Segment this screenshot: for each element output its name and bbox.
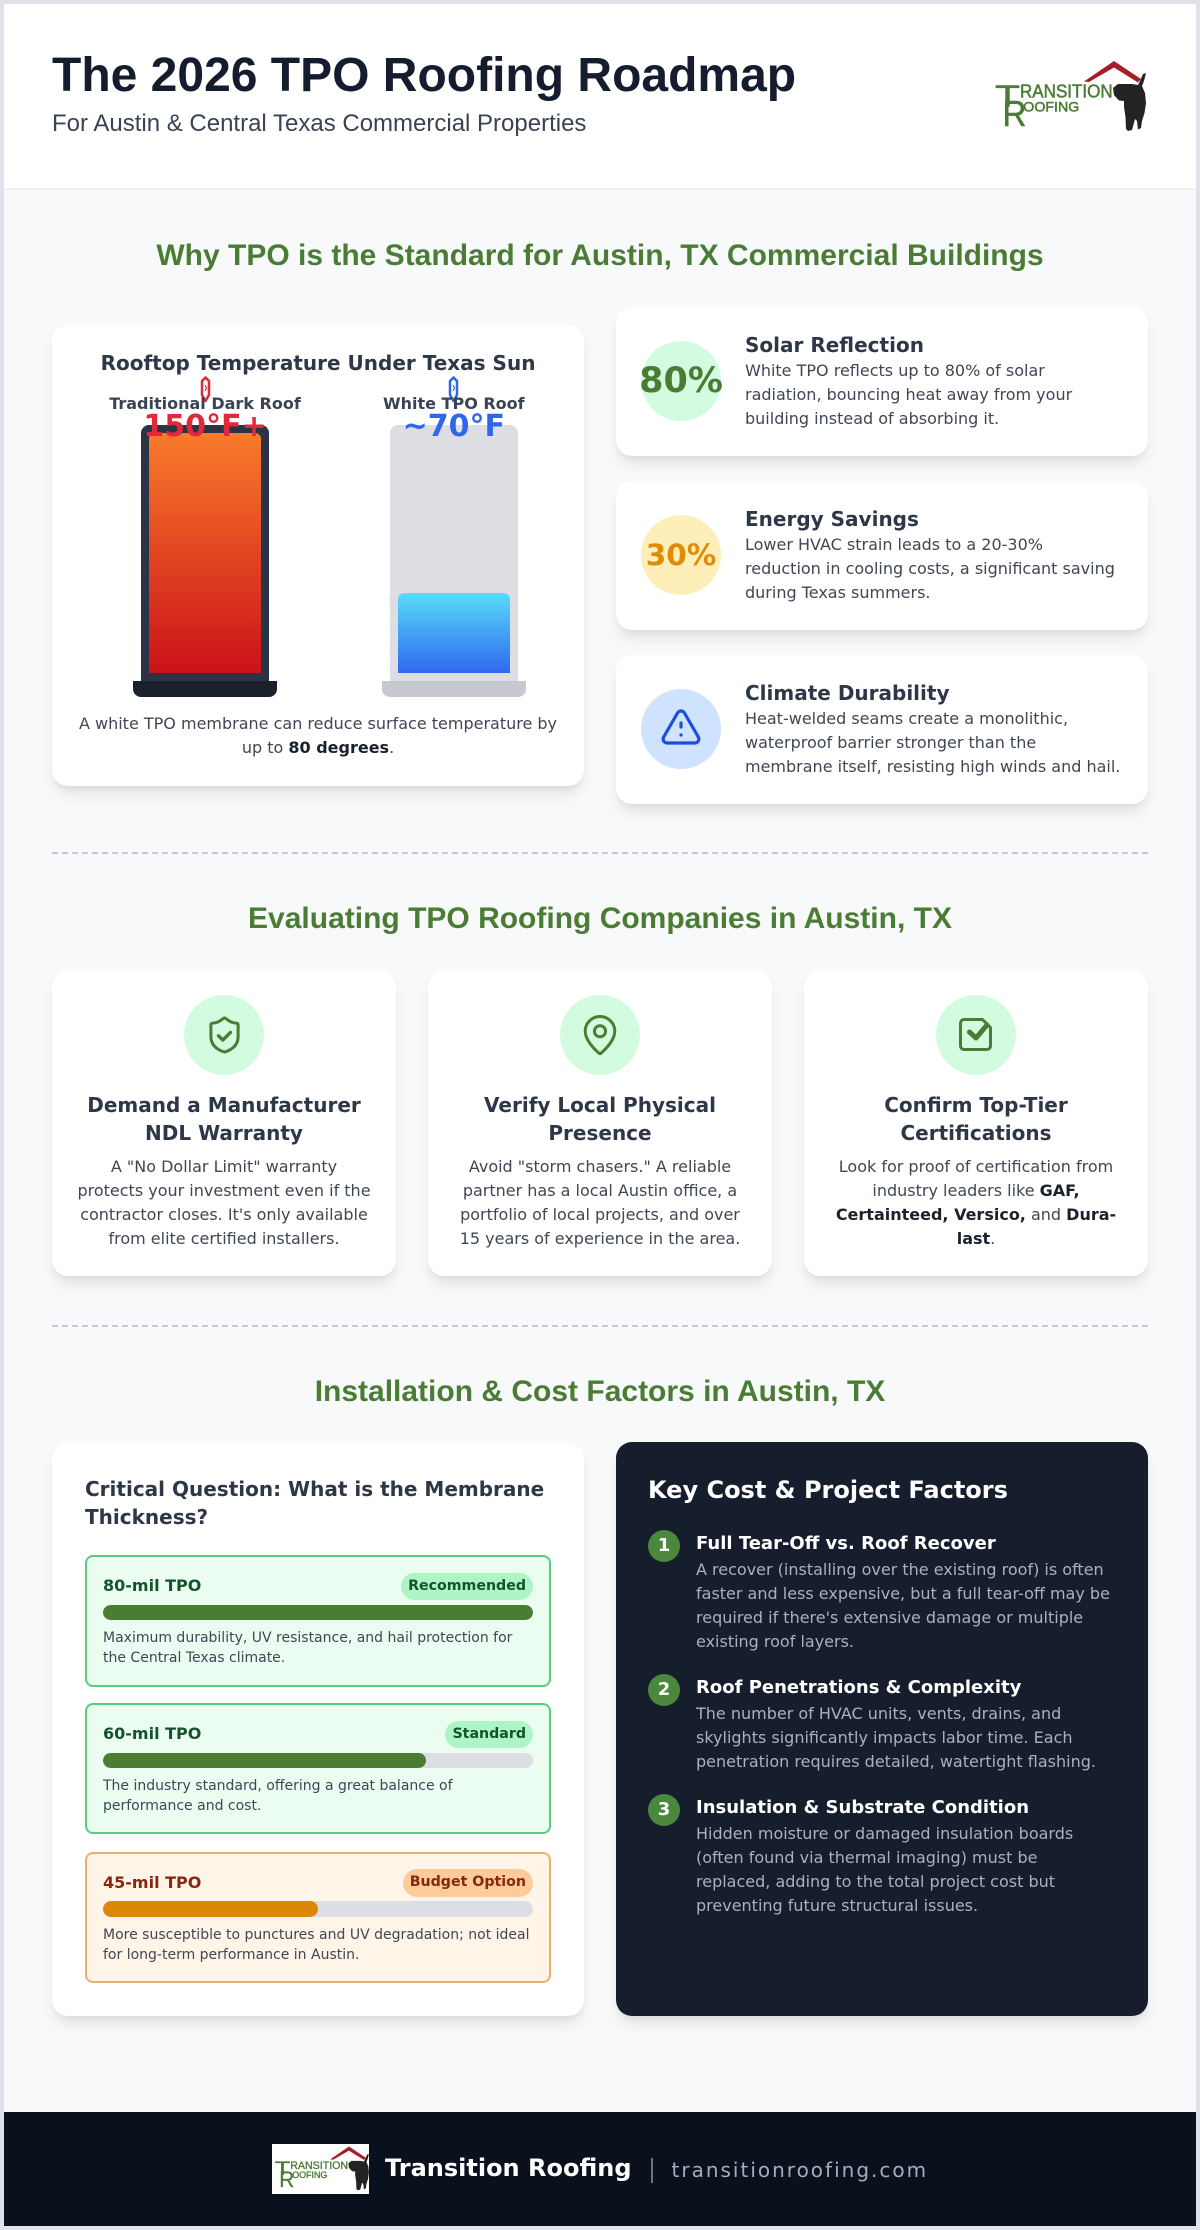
panel: key cost factors bbox=[616, 1442, 1148, 2016]
card text: from elite certified installers. bbox=[108, 1229, 340, 1248]
card text: White TPO reflects up to 80% of solar bbox=[745, 360, 1045, 380]
footer logo: RANSITION bbox=[290, 2160, 348, 2172]
panel: solar reflection bbox=[616, 307, 1148, 456]
card heading: Certifications bbox=[900, 1121, 1052, 1145]
card heading: Solar Reflection bbox=[745, 333, 924, 357]
factor text: skylights significantly impacts labor time. Each bbox=[696, 1728, 1073, 1747]
panel heading: Thickness? bbox=[85, 1505, 208, 1529]
option text bbox=[103, 1630, 512, 1666]
card text: Heat-welded seams create a monolithic, bbox=[745, 708, 1068, 728]
thickness bar bbox=[103, 1752, 533, 1768]
icon: map pin bbox=[560, 995, 640, 1075]
label: White TPO Roof bbox=[383, 394, 525, 413]
card heading: Confirm Top-Tier bbox=[884, 1093, 1068, 1117]
label: Traditional Dark Roof bbox=[109, 394, 301, 413]
number badge: 1 bbox=[658, 1535, 670, 1556]
stat: 30% bbox=[641, 515, 721, 595]
option text bbox=[102, 1778, 453, 1814]
factor text bbox=[696, 1560, 1110, 1651]
panel: energy savings bbox=[616, 481, 1148, 630]
footer logo: OOFING bbox=[292, 2170, 327, 2180]
factor 3 bbox=[648, 1794, 1073, 1915]
option: 60-mil bbox=[85, 1703, 551, 1834]
icon: shield check bbox=[184, 995, 264, 1075]
badge bbox=[401, 1572, 533, 1600]
card text bbox=[77, 1157, 371, 1248]
fill level bbox=[398, 593, 510, 673]
temperature value: ~70°F bbox=[403, 408, 505, 444]
icon: red thermometer bbox=[200, 376, 210, 402]
card heading: Demand a Manufacturer bbox=[87, 1093, 361, 1117]
logo: Transition Roofing: R bbox=[1002, 93, 1026, 134]
factor 2 bbox=[648, 1674, 1096, 1771]
panel: rooftop temperature comparison bbox=[52, 325, 584, 786]
factor text: replaced, adding to the total project cost but bbox=[696, 1872, 1055, 1891]
card text bbox=[836, 1157, 1116, 1248]
factor text: The number of HVAC units, vents, drains, and bbox=[696, 1704, 1061, 1723]
card text: contractor closes. It's only available bbox=[80, 1205, 368, 1224]
logo: Transition Roofing: T bbox=[995, 78, 1020, 114]
subtitle: For Austin & Central Texas Commercial Properties bbox=[52, 110, 586, 136]
panel: local presence bbox=[428, 971, 772, 1276]
card heading: Verify Local Physical bbox=[484, 1093, 716, 1117]
card text: portfolio of local projects, and over bbox=[460, 1205, 740, 1224]
chart heading: Rooftop Temperature Under Texas Sun bbox=[101, 351, 535, 375]
option name: 45-mil TPO bbox=[103, 1873, 201, 1892]
factor text: faster and less expensive, but a full tear-off may be bbox=[696, 1584, 1110, 1603]
card heading bbox=[87, 1093, 361, 1145]
footer logo: R bbox=[279, 2167, 294, 2192]
panel: membrane thickness bbox=[52, 1443, 584, 2016]
factor 1 bbox=[648, 1530, 1110, 1651]
factor text bbox=[696, 1824, 1073, 1915]
badge: Standard bbox=[452, 1726, 526, 1742]
thermometer: traditional dark roof bbox=[109, 376, 301, 697]
card text: last. bbox=[957, 1229, 995, 1248]
option: 80-mil bbox=[85, 1555, 551, 1686]
factor heading: Full Tear-Off vs. Roof Recover bbox=[696, 1533, 996, 1554]
option text: The industry standard, offering a great balance of bbox=[103, 1778, 453, 1794]
option text: More susceptible to punctures and UV degradation; not ideal bbox=[103, 1927, 530, 1943]
panel: climate durability bbox=[616, 655, 1148, 804]
factor text bbox=[696, 1704, 1096, 1771]
factor heading: Insulation & Substrate Condition bbox=[696, 1797, 1029, 1818]
option name: 60-mil TPO bbox=[103, 1724, 201, 1743]
card text: partner has a local Austin office, a bbox=[463, 1181, 737, 1200]
card heading bbox=[484, 1093, 716, 1145]
thermometer: white TPO roof bbox=[382, 376, 526, 697]
number badge bbox=[648, 1794, 680, 1826]
option text: the Central Texas climate. bbox=[103, 1650, 285, 1666]
badge bbox=[445, 1720, 533, 1748]
temperature value: 150°F+ bbox=[143, 408, 267, 444]
card heading bbox=[884, 1093, 1068, 1145]
option: 45-mil bbox=[85, 1852, 551, 1983]
panel heading: Critical Question: What is the Membrane bbox=[85, 1477, 544, 1501]
caption: A white TPO membrane can reduce surface temperature by bbox=[79, 714, 557, 733]
card text bbox=[745, 534, 1115, 602]
card heading: Climate Durability bbox=[745, 681, 950, 705]
option text bbox=[103, 1927, 530, 1963]
card text: membrane itself, resisting high winds and hail. bbox=[745, 756, 1120, 776]
factor text: preventing future structural issues. bbox=[696, 1896, 978, 1915]
stat: 80%: 80% bbox=[639, 361, 723, 401]
factor text: A recover (installing over the existing roof) is often bbox=[696, 1560, 1104, 1579]
company name: Transition Roofing bbox=[385, 2154, 632, 2182]
panel: NDL warranty bbox=[52, 971, 396, 1276]
icon: warning triangle bbox=[641, 689, 721, 769]
card text: waterproof barrier stronger than the bbox=[745, 732, 1036, 752]
card text: industry leaders like GAF, bbox=[872, 1181, 1080, 1200]
panel heading bbox=[85, 1477, 544, 1529]
badge bbox=[403, 1869, 533, 1897]
thickness bar bbox=[103, 1604, 533, 1620]
option name: 80-mil TPO bbox=[103, 1576, 201, 1595]
factor text: (often found via thermal imaging) must be bbox=[696, 1848, 1037, 1867]
stat: 30%: 30% bbox=[646, 538, 716, 572]
thickness bar bbox=[103, 1901, 533, 1917]
logo: Transition Roofing bbox=[995, 61, 1146, 134]
logo: Transition Roofing: OOFING bbox=[1023, 99, 1079, 115]
number badge: 3 bbox=[658, 1799, 670, 1820]
factor text: penetration requires detailed, watertight flashing. bbox=[696, 1752, 1096, 1771]
caption: up to 80 degrees. bbox=[242, 738, 394, 757]
option text: for long-term performance in Austin. bbox=[103, 1947, 359, 1963]
header bbox=[4, 4, 1196, 190]
panel heading: Key Cost & Project Factors bbox=[648, 1476, 1008, 1504]
logo: Transition Roofing: RANSITION bbox=[1020, 81, 1113, 101]
card text bbox=[745, 360, 1072, 428]
card text: Avoid "storm chasers." A reliable bbox=[469, 1157, 731, 1176]
card text bbox=[745, 708, 1120, 776]
card text: A "No Dollar Limit" warranty bbox=[111, 1157, 337, 1176]
card text: radiation, bouncing heat away from your bbox=[745, 384, 1072, 404]
title: The 2026 TPO Roofing Roadmap bbox=[52, 49, 796, 102]
heading: why TPO: Why TPO is the Standard for Austin, TX Commercial Buildings bbox=[156, 238, 1044, 272]
card text: reduction in cooling costs, a significant saving bbox=[745, 558, 1115, 578]
thermometer base bbox=[382, 681, 526, 697]
card text bbox=[460, 1157, 740, 1248]
card text: Look for proof of certification from bbox=[839, 1157, 1113, 1176]
number badge bbox=[648, 1530, 680, 1562]
footer bbox=[4, 2112, 1196, 2226]
icon: blue thermometer bbox=[448, 376, 458, 402]
badge: Budget Option bbox=[410, 1874, 526, 1890]
card text: during Texas summers. bbox=[745, 582, 931, 602]
factor heading: Roof Penetrations & Complexity bbox=[696, 1677, 1021, 1698]
heading: installation and cost: Installation & Cost Factors in Austin, TX bbox=[315, 1374, 885, 1408]
panel: certifications bbox=[804, 971, 1148, 1276]
card text: Certainteed, Versico, and Dura- bbox=[836, 1205, 1116, 1224]
stat: 80% bbox=[641, 341, 721, 421]
card heading: Presence bbox=[548, 1121, 652, 1145]
thermometer base bbox=[133, 681, 277, 697]
factor text: existing roof layers. bbox=[696, 1632, 854, 1651]
card heading: NDL Warranty bbox=[145, 1121, 303, 1145]
card text: Lower HVAC strain leads to a 20-30% bbox=[745, 534, 1043, 554]
factor text: required if there's extensive damage or multiple bbox=[696, 1608, 1083, 1627]
footer divider bbox=[651, 2158, 653, 2183]
badge: Recommended bbox=[408, 1578, 526, 1594]
thermometer tube bbox=[141, 425, 269, 681]
caption bbox=[79, 714, 557, 757]
footer logo bbox=[272, 2144, 369, 2194]
thermometer tube bbox=[390, 425, 518, 681]
fill level bbox=[149, 433, 261, 673]
number badge: 2 bbox=[658, 1679, 670, 1700]
card text: 15 years of experience in the area. bbox=[460, 1229, 740, 1248]
card text: protects your investment even if the bbox=[77, 1181, 371, 1200]
footer logo: T bbox=[275, 2158, 290, 2180]
option text: Maximum durability, UV resistance, and hail protection for bbox=[103, 1630, 512, 1646]
heading: evaluating companies: Evaluating TPO Roofing Companies in Austin, TX bbox=[248, 902, 952, 934]
card heading: Energy Savings bbox=[745, 507, 919, 531]
option text: performance and cost. bbox=[103, 1798, 261, 1814]
icon: checked box bbox=[936, 995, 1016, 1075]
factor text: Hidden moisture or damaged insulation boards bbox=[696, 1824, 1073, 1843]
website: transitionroofing.com bbox=[672, 2158, 928, 2182]
number badge bbox=[648, 1674, 680, 1706]
card text: building instead of absorbing it. bbox=[745, 408, 999, 428]
